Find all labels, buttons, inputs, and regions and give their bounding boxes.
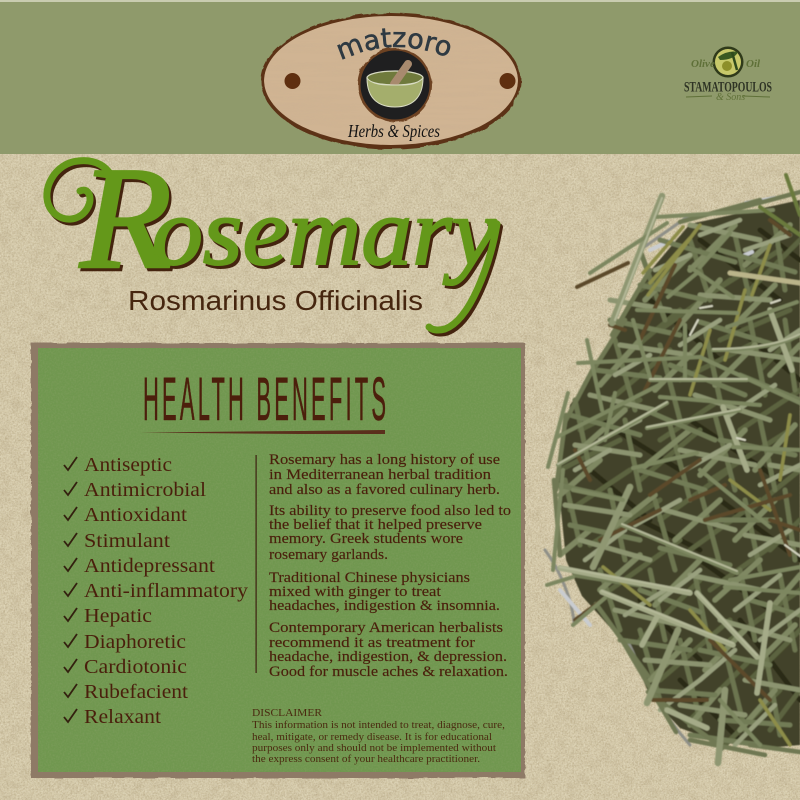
- needles: brown: [575, 220, 800, 700]
- history text: [269, 452, 511, 680]
- olive label: Olive: [691, 58, 715, 70]
- list items: Relaxant: [84, 706, 161, 728]
- plaque right hole: [500, 73, 516, 89]
- list items: Antimicrobial: [84, 479, 206, 501]
- logo: matzoro wooden plaque: [260, 12, 522, 150]
- disclaimer: the express consent of your healthcare practitioner.: [252, 753, 480, 765]
- history text: recommend it as treatment for: [269, 635, 475, 651]
- title shadow: R: [81, 140, 174, 302]
- history text: rosemary garlands.: [269, 547, 388, 563]
- needles: yellow olive: [603, 225, 790, 745]
- mortar circle: [358, 48, 432, 122]
- history text: headaches, indigestion & insomnia.: [269, 598, 500, 614]
- panel: health benefits: [31, 343, 525, 778]
- heading: HEALTH BENEFITS: [143, 365, 386, 433]
- disclaimer: [252, 707, 505, 765]
- needles: mid green: [560, 225, 800, 730]
- benefits list: [64, 454, 249, 728]
- title shadow: [49, 140, 500, 333]
- list items: Cardiotonic: [84, 656, 187, 678]
- title lettering: R: [79, 137, 172, 299]
- history text: Its ability to preserve food also led to: [269, 503, 511, 519]
- heading underline: [140, 430, 385, 434]
- brand sub-label: & Sons: [716, 92, 745, 103]
- needles: pile edge: [554, 192, 800, 755]
- list items: Anti-inflammatory: [84, 580, 249, 602]
- disclaimer: DISCLAIMER: [252, 707, 323, 719]
- disclaimer: purposes only and should not be implemented without: [252, 742, 496, 754]
- list items: Rubefacient: [84, 681, 188, 703]
- olive roundel: [712, 46, 744, 78]
- history text: headache, indigestion, & depression.: [269, 649, 507, 665]
- panel border: [31, 343, 525, 778]
- pile shadow and dark base: [558, 200, 800, 748]
- list items: Diaphoretic: [84, 631, 186, 653]
- needles: olive filler: [560, 240, 800, 750]
- title lettering: [47, 137, 497, 330]
- history text: Good for muscle aches & relaxation.: [269, 664, 508, 680]
- plaque left hole: [284, 73, 300, 89]
- title lettering: osemary: [152, 178, 497, 285]
- logo: Stamatopoulos olive oil: [684, 46, 772, 103]
- subtitle: botanical name: Rosmarinus Officinalis: [128, 285, 423, 316]
- history text: mixed with ginger to treat: [269, 584, 441, 600]
- list items: [84, 454, 249, 728]
- rosemary pile image: [545, 175, 800, 763]
- column divider: [256, 455, 257, 673]
- history text: in Mediterranean herbal tradition: [269, 467, 492, 483]
- history text: memory. Greek students wore: [269, 531, 463, 547]
- list items: Antioxidant: [84, 504, 187, 526]
- panel fill: [38, 348, 521, 772]
- plaque wood: [264, 16, 518, 145]
- header band: [0, 0, 800, 154]
- check marks: [64, 457, 77, 722]
- logo wordmark: matzoro: [337, 28, 450, 60]
- list items: Antiseptic: [84, 454, 172, 476]
- history text: Rosemary has a long history of use: [269, 452, 500, 468]
- title: Rosemary: [47, 137, 500, 333]
- disclaimer: This information is not intended to treat, diagnose, cure,: [252, 719, 505, 731]
- icon: mortar bowl: [367, 64, 423, 107]
- history text: Traditional Chinese physicians: [269, 570, 470, 586]
- history text: and also as a favored culinary herb.: [269, 482, 500, 498]
- list items: Antidepressant: [84, 555, 215, 577]
- needles: major light: [593, 196, 725, 763]
- list items: Hepatic: [84, 605, 152, 627]
- logo tagline: Herbs & Spices: [347, 121, 440, 141]
- needles: dark filler: [590, 230, 800, 740]
- disclaimer: heal, mitigate, or remedy disease. It is for educational: [252, 731, 492, 743]
- history text: the belief that it helped preserve: [269, 517, 482, 533]
- plaque bark edge: [261, 13, 521, 149]
- oil label: Oil: [746, 58, 761, 70]
- list items: Stimulant: [84, 530, 170, 552]
- history text: Contemporary American herbalists: [269, 620, 503, 636]
- title shadow: osemary: [154, 181, 500, 288]
